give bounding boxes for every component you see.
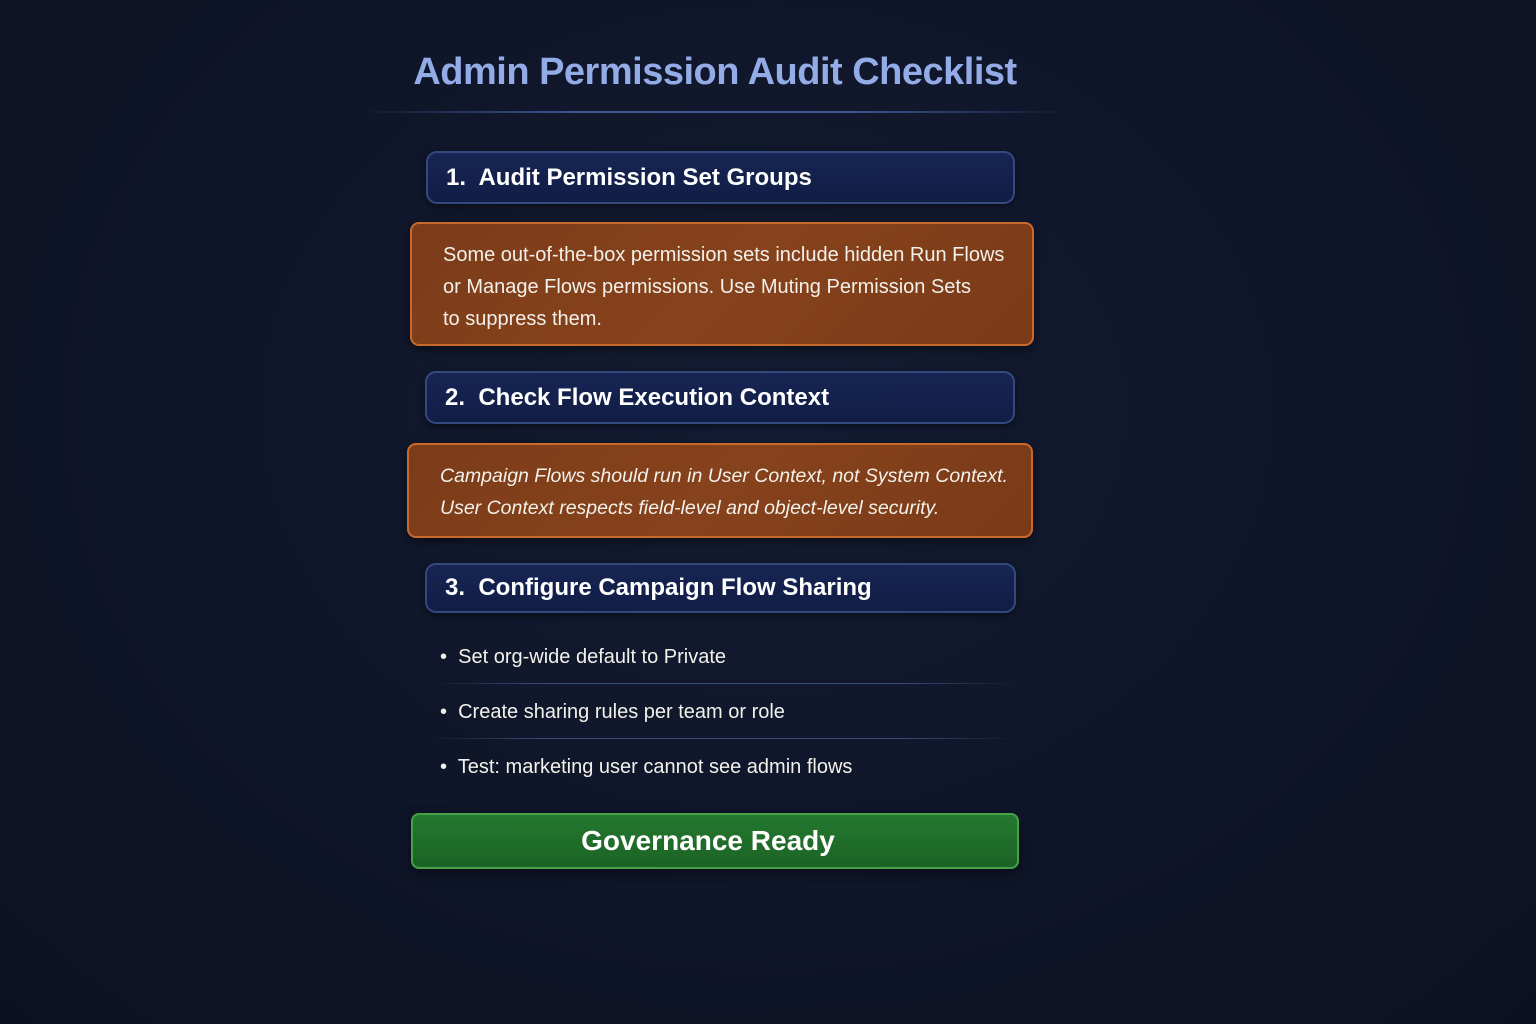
bullet 1: • Set org-wide default to Private	[440, 646, 726, 668]
heading: step 1	[426, 151, 1015, 204]
callout: step 2 note: Campaign Flows should run in User Context, not System Context.	[440, 465, 1008, 487]
callout: step 1 note: Some out-of-the-box permission sets include hidden Run Flows	[443, 244, 1004, 266]
bullet list	[440, 646, 1003, 778]
callout: step 2 note: User Context respects field-level and object-level security.	[440, 497, 939, 519]
bullet 3: • Test: marketing user cannot see admin flows	[440, 756, 852, 778]
status badge: governance ready	[411, 813, 1019, 869]
title: Admin Permission Audit Checklist	[413, 51, 1017, 93]
callout: step 1 note	[410, 222, 1034, 346]
heading: step 2	[425, 371, 1015, 424]
heading: step 3	[425, 563, 1016, 613]
callout: step 1 note: to suppress them.	[443, 308, 602, 330]
status badge: governance ready: Governance Ready	[581, 825, 835, 856]
callout: step 2 note	[407, 443, 1033, 538]
heading: step 3: 3. Configure Campaign Flow Sharing	[445, 574, 872, 601]
callout: step 1 note: or Manage Flows permissions. Use Muting Permission Sets	[443, 276, 971, 298]
heading: step 1: 1. Audit Permission Set Groups	[446, 164, 812, 190]
heading: step 2: 2. Check Flow Execution Context	[445, 384, 829, 410]
bullet 2: • Create sharing rules per team or role	[440, 701, 785, 723]
